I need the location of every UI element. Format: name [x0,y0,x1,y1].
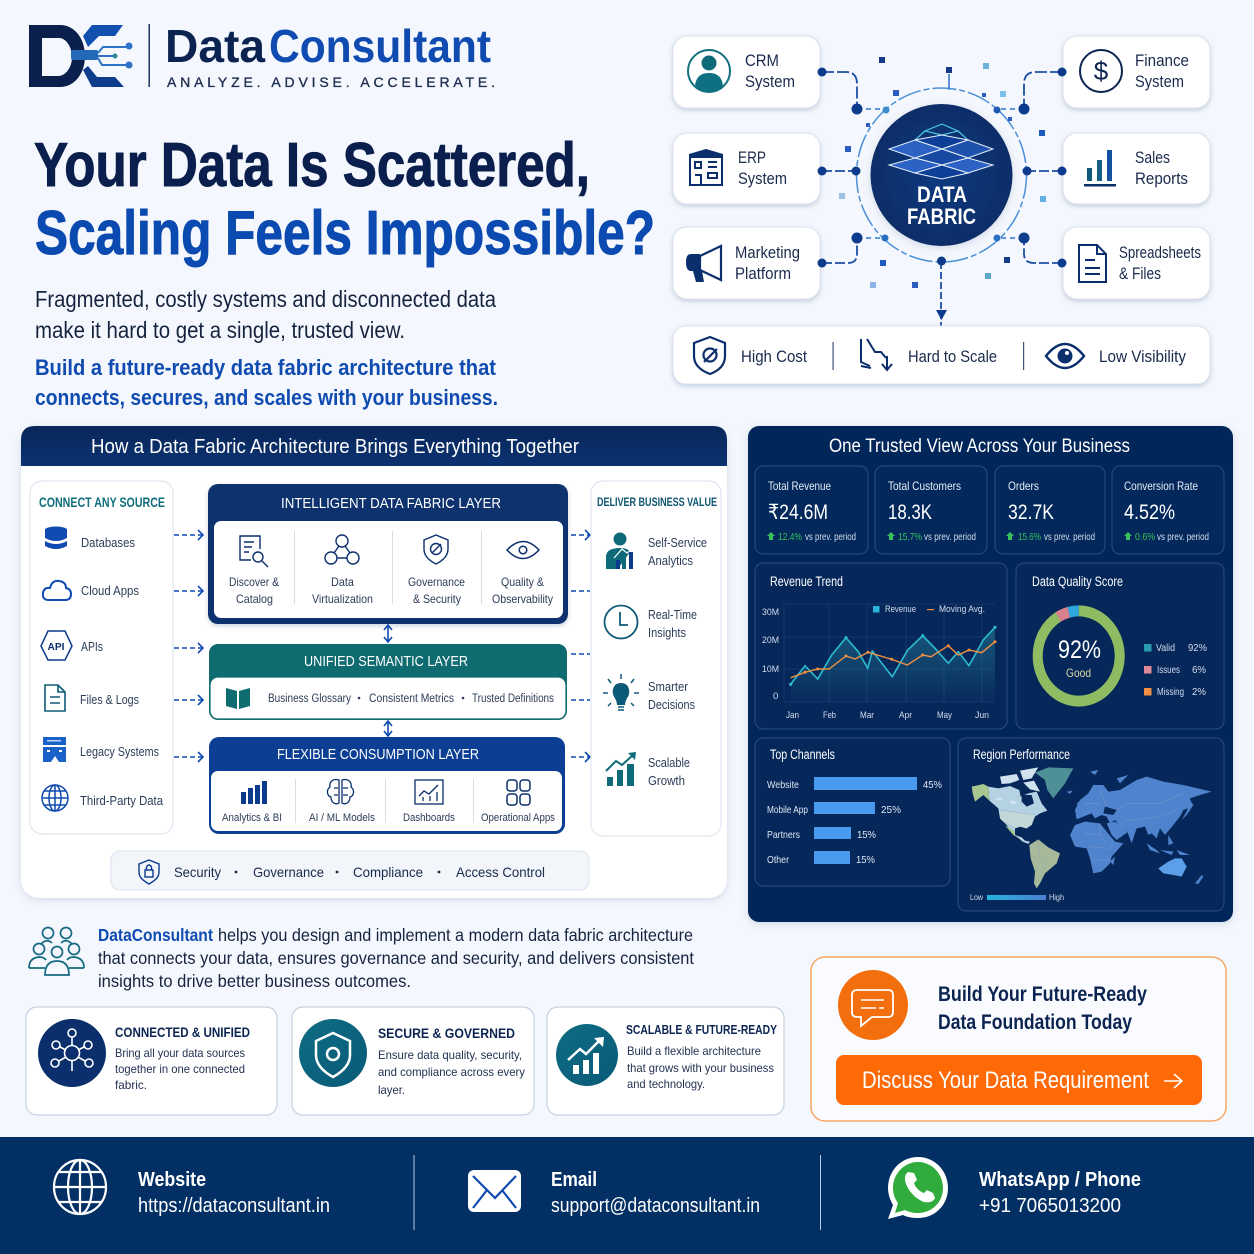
panel header: How a Data Fabric Architecture Brings Everything Together [91,436,579,458]
value proposition: Build a future-ready data fabric architecture that [35,355,497,380]
card: ERP system: ERP [738,148,766,167]
chart: revenue trend: Moving Avg. [939,604,985,615]
callout: call to action: Data Foundation Today [938,1011,1132,1034]
chart: data quality score: 92% [1188,643,1207,654]
panel: security and governance strip: Access Control [456,864,545,880]
card: scalable and future-ready [547,1007,784,1115]
panel: connect any source: CONNECT ANY SOURCE [39,494,165,510]
card: Marketing platform [673,227,820,299]
intro text block: DataConsultant [98,925,213,945]
chart: revenue trend: Revenue [885,604,916,615]
KPI: orders: 15.6% [1018,531,1041,543]
card: Finance system: System [1135,72,1184,91]
contact: email [551,1169,760,1217]
chart: data quality score [1016,563,1224,729]
fabric layers icon [889,124,993,179]
card: Marketing platform: Marketing [735,243,800,262]
chart: top channels: Website [767,779,799,791]
KPI: conversion rate: Conversion Rate [1124,479,1198,493]
card: connected and unified: CONNECTED & UNIFIED [115,1025,250,1040]
panel: connect any source: Cloud Apps [81,583,139,598]
KPI: conversion rate [1112,466,1224,554]
KPI: total revenue: vs prev. period [805,531,856,543]
button: discuss your data requirement: Discuss Your Data Requirement [862,1067,1149,1094]
chart: revenue trend: May [937,710,952,721]
contact: email: support@dataconsultant.in [551,1195,760,1217]
card: scalable and future-ready: Build a flexible architecture [627,1044,761,1058]
panel: pain points bar: High Cost [741,347,807,366]
panel: unified semantic layer [209,644,567,720]
card: scalable and future-ready: and technology. [627,1077,705,1091]
value arrows [571,530,590,762]
panel: intelligent data fabric layer: Discover & [229,575,279,589]
card: Spreadsheets and files: Spreadsheets [1119,243,1201,262]
panel: pain points bar: Hard to Scale [908,347,997,366]
panel: connect any source: Files & Logs [80,692,139,707]
card: CRM system: CRM [745,51,779,70]
chart: region performance map: High [1049,892,1064,902]
chart: top channels: Other [767,854,789,866]
panel: connect any source [30,481,173,834]
KPI: total customers: Total Customers [888,479,961,493]
chart: top channels: Top Channels [770,747,835,762]
contact: website: https://dataconsultant.in [138,1195,330,1217]
chart: data quality score: Missing [1157,687,1184,698]
panel: intelligent data fabric layer: Observability [492,592,553,606]
icon: operational apps [507,780,530,805]
KPI: total revenue [755,466,868,554]
chart: revenue trend: 20M [762,635,779,646]
panel: deliver business value: Decisions [648,697,695,712]
panel: intelligent data fabric layer: Catalog [236,592,273,606]
panel: intelligent data fabric layer: & Security [413,592,461,606]
panel: intelligent data fabric layer: Data [331,575,354,589]
panel: deliver business value: DELIVER BUSINESS VALUE [597,495,717,509]
KPI: orders [995,466,1105,554]
panel: deliver business value: Analytics [648,553,693,568]
icon: governance shield [424,535,448,564]
chart: region performance map: Low [970,892,984,902]
icon: legacy systems [43,737,66,762]
chart: region performance map [958,738,1224,911]
panel: pain points bar: Low Visibility [1099,347,1186,366]
card: Sales reports: Reports [1135,169,1188,188]
icon: cloud [43,581,71,600]
icon: file [45,685,65,711]
panel: security and governance strip: Compliance [353,864,423,880]
logo [29,20,495,90]
card: secure and governed: layer. [378,1083,405,1097]
panel: flexible consumption layer [209,737,565,834]
card: ERP system [673,133,820,204]
panel: intelligent data fabric layer: Quality & [501,575,544,589]
card: Spreadsheets and files: & Files [1119,264,1161,283]
card: Marketing platform: Platform [735,264,791,283]
chart: top channels: 25% [881,804,901,816]
KPI: total customers [875,466,987,554]
subtitle [35,286,496,343]
KPI: orders: Orders [1008,479,1039,493]
panel: security and governance strip: Security [174,864,221,880]
icon: book [226,688,250,709]
card: connected and unified: together in one connected [115,1062,245,1076]
KPI: total customers: 15.7% [898,531,922,543]
value proposition [35,355,498,410]
chart: revenue trend: 10M [762,664,779,675]
icon: network hub [38,1019,106,1087]
icon: clock [604,606,638,638]
panel: deliver business value [591,481,721,836]
card: connected and unified [26,1007,277,1115]
icon: security shield lock [139,860,159,884]
panel: intelligent data fabric layer: Virtualization [312,592,373,606]
panel: how a data fabric architecture [21,426,727,898]
KPI: total customers: vs prev. period [924,531,976,543]
panel: intelligent data fabric layer [208,484,568,624]
icon: globe [42,785,68,811]
title [34,131,655,268]
scattered data squares [839,57,1046,288]
chart: region performance map: Region Performance [973,747,1070,762]
icon: lightbulb [603,674,639,710]
card: Finance system [1063,36,1210,108]
logo wordmark: Data [165,20,265,72]
icon: data virtualization [325,535,359,564]
icon: AI brain [327,780,354,804]
panel: unified semantic layer: Trusted Definitions [472,693,554,705]
panel: security and governance strip: Governance [253,864,324,880]
icon: quality eye [507,542,539,558]
panel: deliver business value: Scalable [648,755,690,770]
icon: self-service analytics [606,532,635,569]
chart: revenue trend: Feb [823,710,836,721]
connectors [822,72,1062,326]
card: secure and governed: Ensure data quality, security, [378,1048,522,1062]
chart: revenue trend: Revenue Trend [770,574,843,589]
subtitle: make it hard to get a single, trusted view. [35,317,405,343]
card: Spreadsheets and files [1063,227,1210,299]
tagline: ANALYZE. ADVISE. ACCELERATE. [167,74,495,90]
logo icon [29,25,132,87]
panel: unified semantic layer: Consistent Metrics [369,693,454,705]
card: secure and governed: SECURE & GOVERNED [378,1026,515,1041]
panel: deliver business value: Insights [648,625,686,640]
KPI: conversion rate: 0.6% [1135,531,1155,543]
icon: people group [29,928,84,975]
contact: whatsapp and phone: WhatsApp / Phone [979,1169,1141,1191]
icon: growth chart [556,1024,618,1086]
contact: whatsapp and phone: +91 7065013200 [979,1195,1121,1217]
icon: dashboard [415,780,443,804]
chart: data quality score: Data Quality Score [1032,574,1123,589]
KPI: total revenue: 12.4% [778,531,802,543]
central data fabric circle: FABRIC [907,204,976,229]
intro text block: that connects your data, ensures governance and security, and delivers consistent [98,948,694,968]
panel: connect any source: Legacy Systems [80,744,159,759]
chart: top channels: Partners [767,829,800,841]
contact: whatsapp and phone [979,1169,1141,1217]
panel: one trusted view dashboard [748,426,1233,922]
icon: scalable growth [606,752,636,786]
panel: connect any source: APIs [81,639,103,654]
callout: call to action: Build Your Future-Ready [938,983,1147,1006]
chart: data quality score: Valid [1156,643,1175,654]
card: scalable and future-ready: that grows with your business [627,1061,774,1075]
panel: flexible consumption layer: Analytics & BI [222,812,282,824]
panel: flexible consumption layer: Operational Apps [481,812,555,824]
icon: whatsapp [888,1157,948,1219]
card: secure and governed [292,1007,534,1115]
chart: top channels [755,738,950,886]
data fabric hub diagram [673,36,1210,326]
card: Finance system: Finance [1135,51,1189,70]
double arrow top [384,625,392,642]
chart: data quality score: 92% [1058,636,1101,664]
panel: connect any source: Third-Party Data [80,793,164,808]
button: discuss your data requirement [836,1055,1202,1105]
panel: one trusted view dashboard: One Trusted View Across Your Business [829,435,1130,457]
chart: revenue trend: 30M [762,607,779,618]
panel: deliver business value: Real-Time [648,607,697,622]
panel: connect any source: Databases [81,535,135,550]
icon: API hexagon: API [48,641,65,653]
double arrow bottom [384,721,392,736]
icon: shield [299,1019,367,1087]
KPI: total revenue: Total Revenue [768,479,831,493]
chart: revenue trend: Jun [975,710,989,721]
chart: data quality score: Issues [1157,665,1180,676]
intro text block: insights to drive better business outcomes. [98,971,411,991]
card: Finance system: $ [1094,56,1109,86]
panel: pain points bar [673,326,1210,384]
chart: data quality score: 6% [1192,665,1206,676]
chart: revenue trend: 0 [773,691,778,702]
chart: top channels: 45% [923,779,942,791]
icon: analytics bars [241,781,267,804]
chart: data quality score: Good [1066,666,1091,680]
intro text block [29,925,694,991]
KPI: orders: 32.7K [1008,501,1054,524]
footer [0,1137,1254,1254]
icon: low visibility eye [1046,344,1084,368]
KPI: total revenue: ₹24.6M [768,501,828,524]
callout: call to action [811,957,1226,1121]
chart: top channels: Mobile App [767,804,808,816]
card: Sales reports [1063,133,1210,204]
central data fabric circle: DATA [917,182,967,207]
icon: hard to scale [861,339,892,370]
card: ERP system: System [738,169,787,188]
panel: security and governance strip [111,851,589,890]
icon: website globe [54,1160,106,1214]
chart: top channels: 15% [857,829,876,841]
chart: data quality score: 2% [1192,687,1206,698]
value proposition: connects, secures, and scales with your business. [35,385,498,410]
card: connected and unified: fabric. [115,1078,147,1092]
KPI: conversion rate: vs prev. period [1157,531,1209,543]
panel: flexible consumption layer: Dashboards [403,812,455,824]
card: CRM system: System [745,72,795,91]
chart: top channels: 15% [856,854,875,866]
chart: revenue trend: Jan [786,710,799,721]
chart: revenue trend: Mar [860,710,874,721]
card: secure and governed: and compliance across every [378,1065,525,1079]
chart: revenue trend: Apr [899,710,912,721]
card: Sales reports: Sales [1135,148,1170,167]
icon: databases [45,526,67,549]
title: Your Data Is Scattered, [34,131,590,200]
chart: revenue trend [755,563,1007,729]
source arrows [174,530,203,762]
icon: chat bubble [838,970,908,1040]
panel: deliver business value: Growth [648,773,685,788]
panel: intelligent data fabric layer: INTELLIGENT DATA FABRIC LAYER [281,495,501,512]
panel: deliver business value: Self-Service [648,535,707,550]
KPI: total customers: 18.3K [888,501,932,524]
panel header [21,426,727,466]
logo: Consultant [269,20,491,72]
panel: unified semantic layer: UNIFIED SEMANTIC LAYER [304,653,468,670]
intro text block: helps you design and implement a modern data fabric architecture [218,925,693,945]
icon: email envelope [468,1170,521,1212]
KPI: conversion rate: 4.52% [1124,501,1175,524]
panel: flexible consumption layer: FLEXIBLE CONSUMPTION LAYER [277,746,479,763]
card: CRM system [673,36,820,108]
contact: website [138,1169,330,1217]
title: Scaling Feels Impossible? [35,199,655,268]
panel: unified semantic layer: Business Glossary [268,693,351,705]
KPI: orders: vs prev. period [1044,531,1095,543]
icon: API hexagon [41,631,72,660]
contact: email: Email [551,1169,597,1191]
icon: discover and catalog [240,536,268,567]
central data fabric circle [870,104,1012,246]
world map [972,767,1212,888]
panel: flexible consumption layer: AI / ML Models [309,812,375,824]
panel: intelligent data fabric layer: Governance [408,575,465,589]
icon: high cost shield [694,337,725,374]
subtitle: Fragmented, costly systems and disconnected data [35,286,496,312]
panel: deliver business value: Smarter [648,679,689,694]
card: connected and unified: Bring all your data sources [115,1046,245,1060]
card: scalable and future-ready: SCALABLE & FUTURE-READY [626,1022,777,1037]
contact: website: Website [138,1169,206,1191]
